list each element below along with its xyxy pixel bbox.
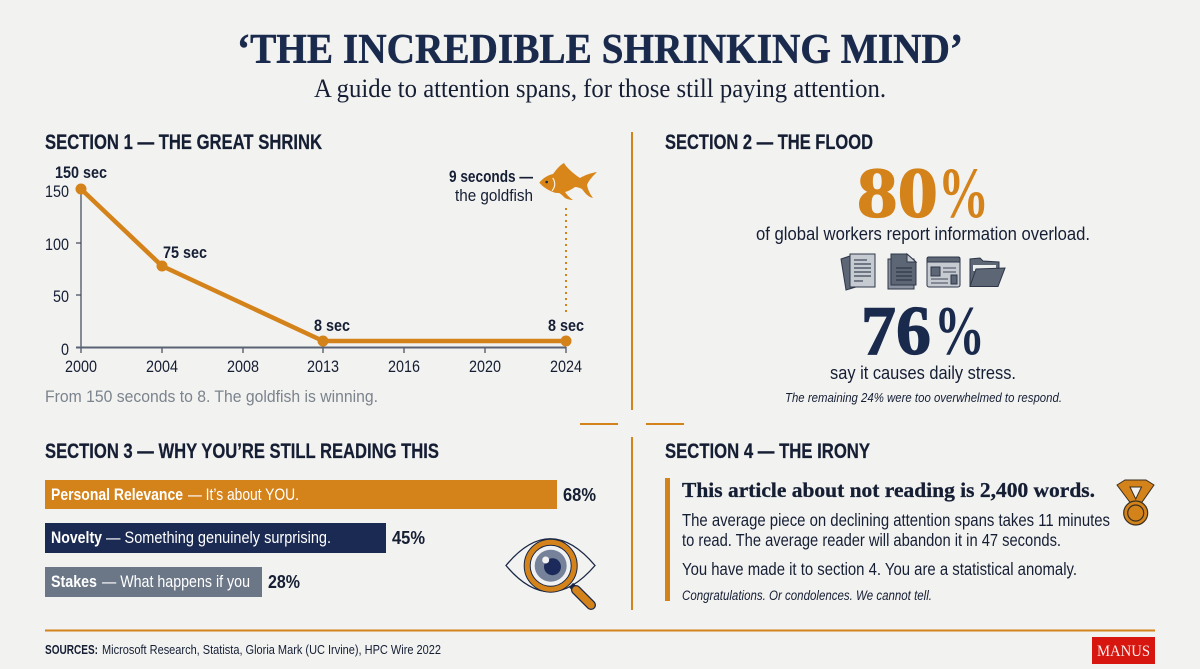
- subtitle: A guide to attention spans, for those still paying attention.: [314, 74, 886, 103]
- icons: documents and folder: [841, 254, 1005, 290]
- bar: personal relevance 68%: — It’s about YOU.: [188, 485, 299, 504]
- body text: to read. The average reader will abandon it in 47 seconds.: [682, 530, 1061, 550]
- stat text: daily stress: say it causes daily stress.: [830, 362, 1016, 383]
- panel: section 1 the great shrink: [45, 131, 597, 406]
- line chart: 100: [45, 235, 69, 254]
- panel: section 4 the irony: [665, 440, 1154, 603]
- icon: eye under magnifying glass: [506, 539, 595, 605]
- line chart: 2024: [550, 357, 582, 376]
- icon: goldfish: [539, 163, 597, 200]
- stat text: overload: of global workers report information overload.: [756, 223, 1090, 244]
- icon: medal: [1117, 480, 1154, 525]
- title: ‘THE INCREDIBLE SHRINKING MIND’: [237, 27, 963, 73]
- bar: stakes 28%: Stakes: [51, 572, 97, 591]
- stat: 76%: 76: [861, 293, 931, 370]
- line chart: 8 sec: [314, 316, 350, 335]
- callout: goldfish label: [449, 167, 533, 205]
- italic sign-off: Congratulations. Or condolences. We cannot tell.: [682, 588, 932, 603]
- callout: goldfish label: the goldfish: [455, 186, 533, 205]
- bar: stakes 28%: — What happens if you: [102, 572, 250, 591]
- panel: section 3 why you're still reading: [45, 440, 596, 605]
- line chart: [45, 163, 584, 376]
- line chart: 0: [61, 340, 69, 359]
- stat: 80%: 80: [857, 153, 938, 233]
- stat: 80%: [857, 153, 989, 233]
- line chart: 2013: [307, 357, 339, 376]
- heading: section 3: SECTION 3 — WHY YOU’RE STILL READING THIS: [45, 440, 439, 463]
- footnote: The remaining 24% were too overwhelmed to respond.: [785, 390, 1062, 405]
- bar: personal relevance 68%: [45, 480, 596, 509]
- bar: stakes 28%: [45, 567, 300, 597]
- line chart: 2020: [469, 357, 501, 376]
- body text: [682, 510, 1110, 579]
- bar: personal relevance 68%: 68%: [563, 485, 596, 505]
- line chart: 2016: [388, 357, 420, 376]
- stat: 76%: [861, 293, 985, 370]
- heading: section 4: SECTION 4 — THE IRONY: [665, 440, 870, 463]
- bar: novelty 45%: 45%: [392, 528, 425, 548]
- bar: novelty 45%: — Something genuinely surprising.: [106, 528, 331, 547]
- sources footer: Microsoft Research, Statista, Gloria Mark (UC Irvine), HPC Wire 2022: [102, 642, 441, 657]
- stat: 76%: %: [934, 293, 985, 370]
- line chart: 8 sec: [548, 316, 584, 335]
- bar: novelty 45%: Novelty: [51, 528, 102, 547]
- logo: MANUS badge: [1092, 637, 1155, 664]
- line chart: 150: [45, 182, 69, 201]
- heading: section 1: SECTION 1 — THE GREAT SHRINK: [45, 131, 322, 154]
- heading: section 2: SECTION 2 — THE FLOOD: [665, 131, 873, 154]
- body text: You have made it to section 4. You are a statistical anomaly.: [682, 559, 1077, 579]
- line chart: 2008: [227, 357, 259, 376]
- chart caption: From 150 seconds to 8. The goldfish is winning.: [45, 387, 378, 406]
- line chart: 2004: [146, 357, 178, 376]
- body text: The average piece on declining attention spans takes 11 minutes: [682, 510, 1110, 530]
- callout: goldfish label: 9 seconds —: [449, 167, 533, 186]
- bar: personal relevance 68%: Personal Relevance: [51, 485, 183, 504]
- logo: MANUS badge: MANUS: [1097, 643, 1150, 660]
- stat: 80%: %: [938, 153, 989, 233]
- bar: stakes 28%: 28%: [268, 572, 300, 592]
- bar: novelty 45%: [45, 523, 425, 553]
- line chart: 2000: [65, 357, 97, 376]
- line chart: 150 sec: [55, 163, 107, 182]
- line chart: 75 sec: [163, 243, 207, 262]
- sources footer: SOURCES:: [45, 642, 98, 657]
- panel: section 2 the flood: [665, 131, 1090, 405]
- callout headline: This article about not reading is 2,400 words.: [682, 478, 1095, 502]
- line chart: 50: [53, 287, 69, 306]
